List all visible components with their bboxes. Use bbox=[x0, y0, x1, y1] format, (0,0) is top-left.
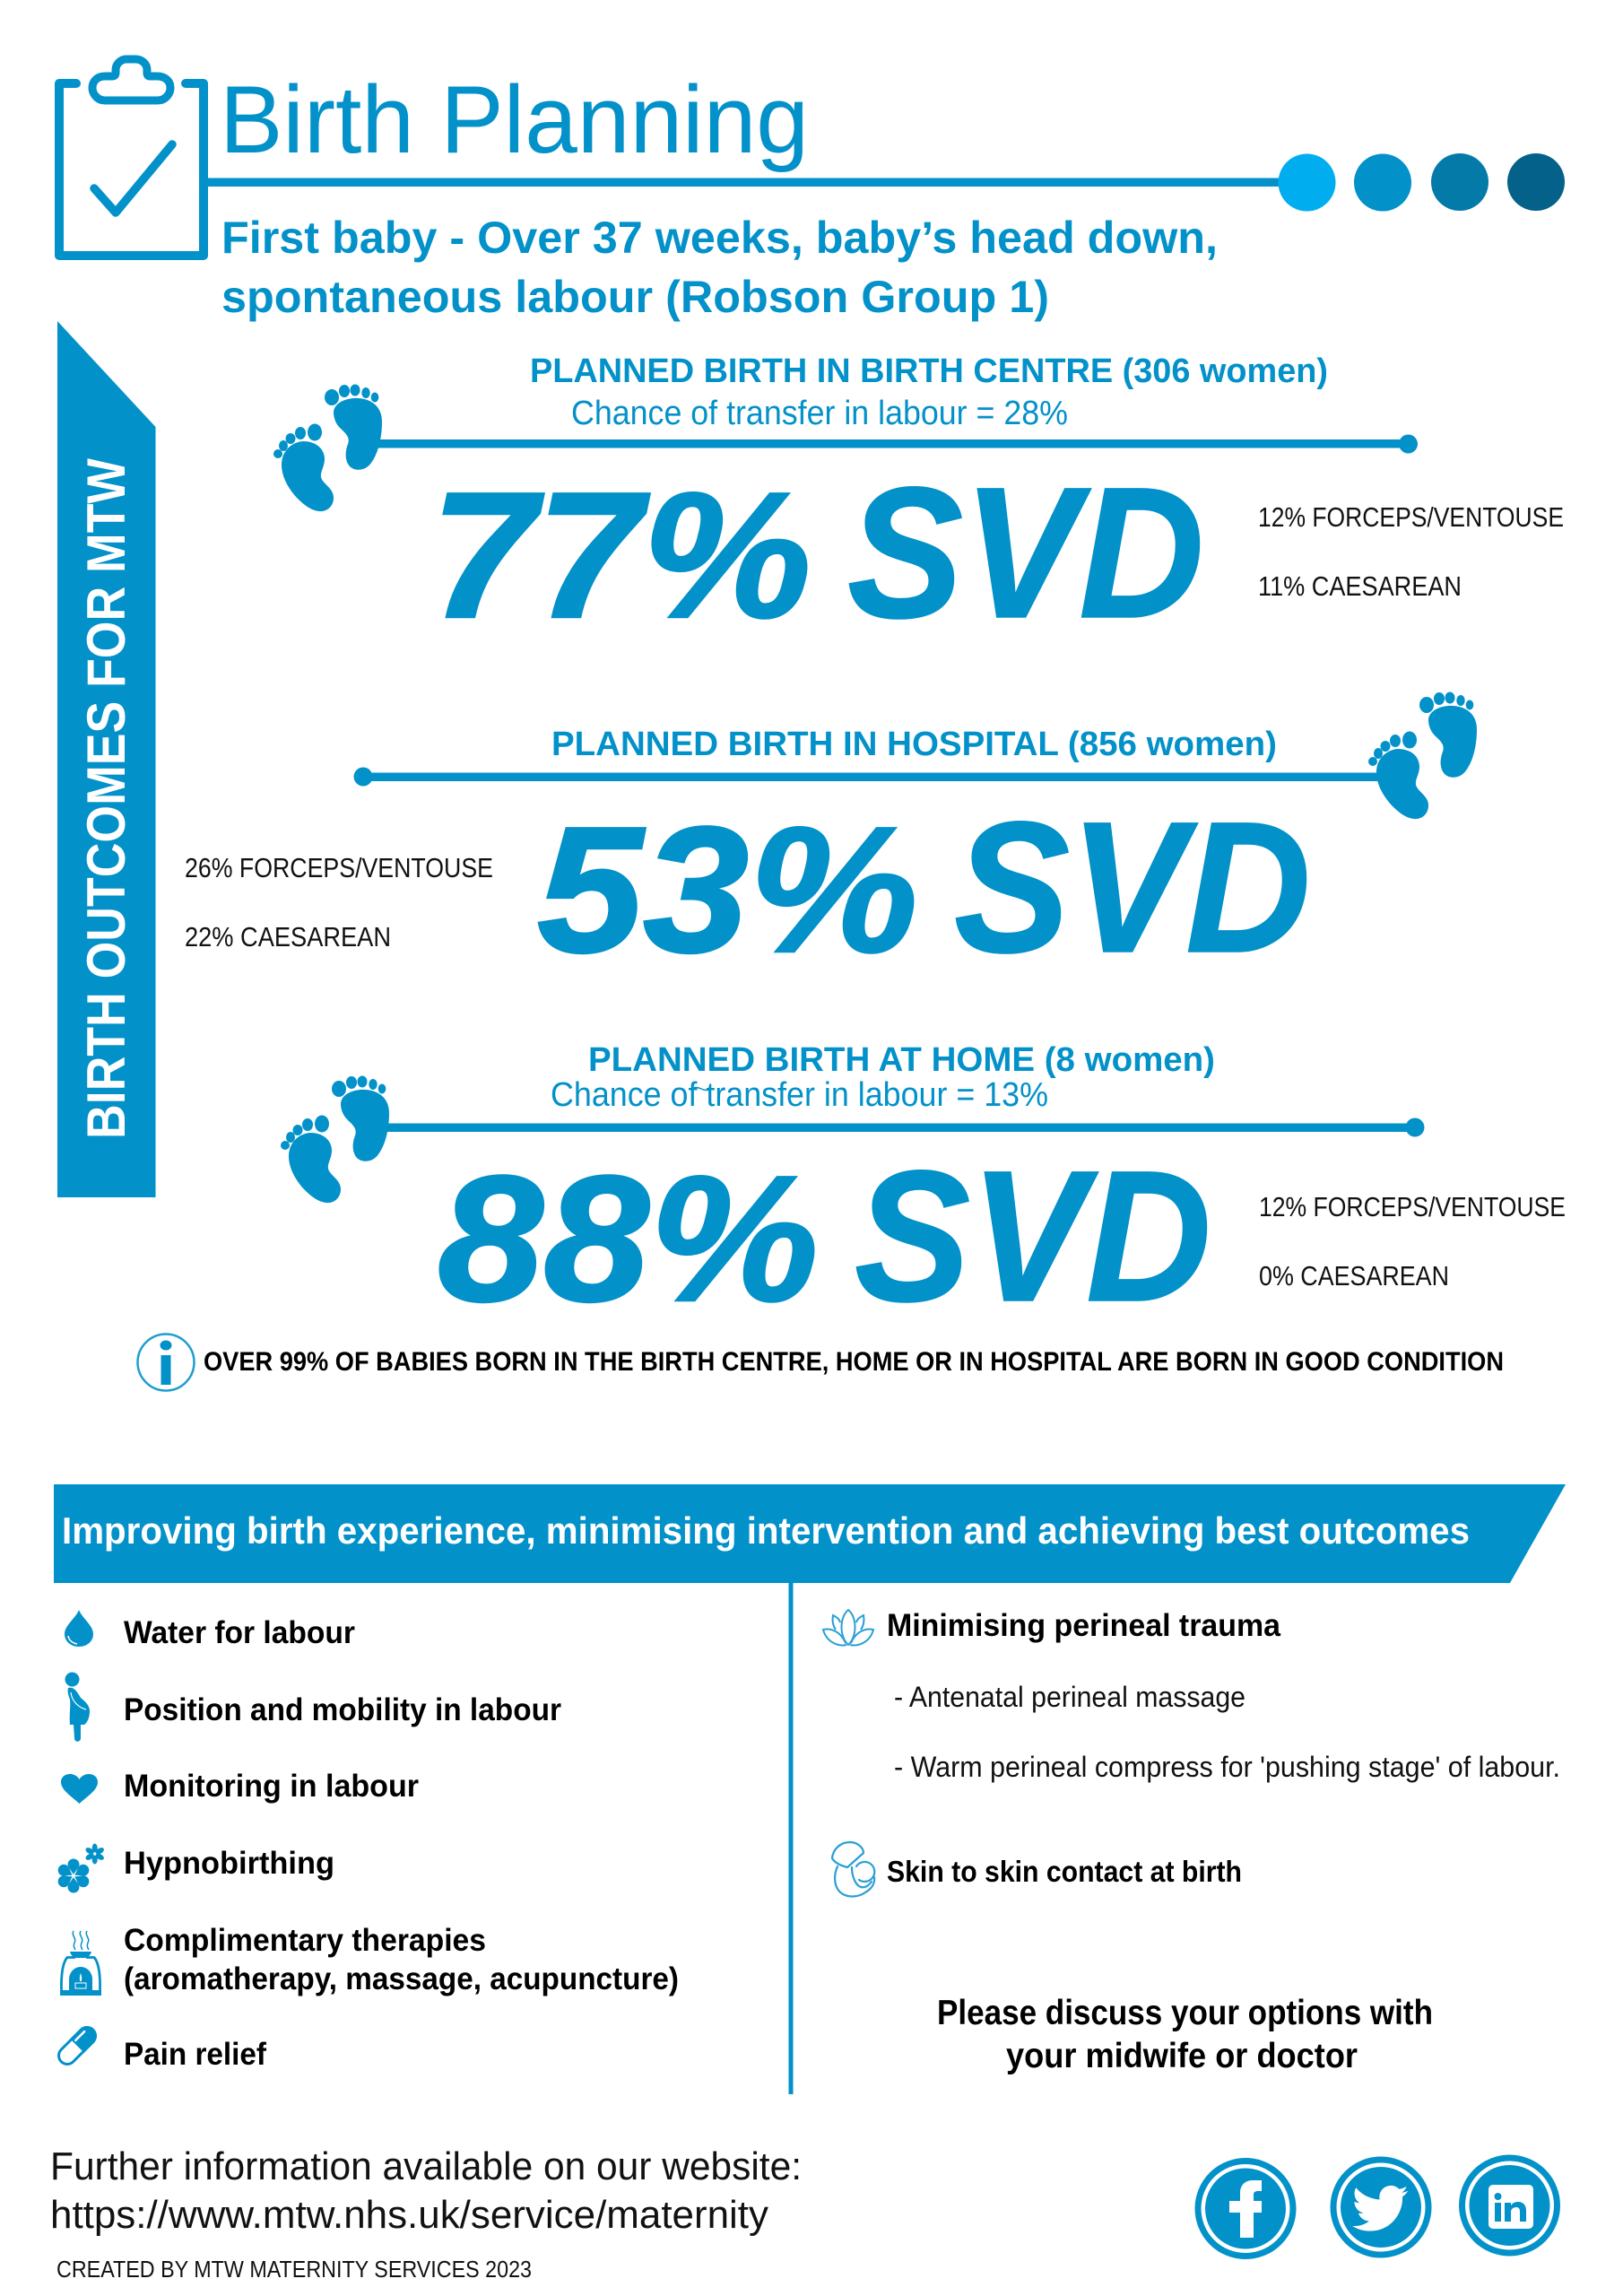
item: Minimising perineal trauma bbox=[887, 1608, 1281, 1643]
item: Monitoring in labour bbox=[124, 1769, 419, 1804]
item: Pain relief bbox=[124, 2037, 266, 2072]
panel: planned birth in hospital bbox=[185, 692, 1477, 992]
icon: linkedin bbox=[1462, 2158, 1557, 2253]
icon: pregnant woman bbox=[65, 1672, 90, 1742]
other outcomes: 26% FORCEPS/VENTOUSE bbox=[185, 852, 493, 883]
heading: PLANNED BIRTH AT HOME (8 women) bbox=[588, 1041, 1215, 1079]
other outcomes: 12% FORCEPS/VENTOUSE bbox=[1259, 1191, 1566, 1222]
item: Water for labour bbox=[124, 1615, 355, 1650]
subtitle bbox=[221, 213, 1218, 322]
panel: planned birth in birth centre bbox=[273, 352, 1564, 657]
sub-item: - Warm perineal compress for 'pushing stage' of labour. bbox=[894, 1751, 1560, 1783]
big figure: 77% SVD bbox=[430, 449, 1204, 657]
subtitle: spontaneous labour (Robson Group 1) bbox=[221, 272, 1049, 322]
other outcomes: 11% CAESAREAN bbox=[1258, 570, 1462, 602]
stray mark above transfer text bbox=[690, 1087, 712, 1091]
other outcomes bbox=[1258, 501, 1564, 602]
panel: planned birth at home bbox=[281, 1041, 1566, 1341]
item bbox=[124, 1923, 679, 1996]
side ribbon: birth outcomes for MTW: BIRTH OUTCOMES FOR MTW bbox=[76, 458, 136, 1139]
footer information bbox=[50, 2144, 802, 2283]
item: Complimentary therapies bbox=[124, 1923, 486, 1958]
item: Hypnobirthing bbox=[124, 1846, 334, 1881]
icon: twitter bbox=[1333, 2160, 1428, 2255]
item: (aromatherapy, massage, acupuncture) bbox=[124, 1961, 679, 1996]
timeline rule bbox=[353, 768, 1381, 786]
big figure: 77% SVD: 77% bbox=[430, 456, 812, 656]
big figure: 88% SVD bbox=[438, 1133, 1211, 1341]
panel: left list bbox=[55, 1610, 679, 2072]
big figure: 53% SVD: SVD bbox=[954, 784, 1311, 992]
other outcomes bbox=[185, 852, 493, 952]
icon: heart bbox=[61, 1774, 98, 1804]
subtitle: First baby - Over 37 weeks, baby’s head down, bbox=[221, 213, 1218, 263]
other outcomes: 0% CAESAREAN bbox=[1259, 1260, 1449, 1292]
other outcomes: 12% FORCEPS/VENTOUSE bbox=[1258, 501, 1564, 533]
social icons bbox=[1198, 2158, 1557, 2257]
icon: baby feet bbox=[273, 384, 382, 511]
heading: PLANNED BIRTH IN HOSPITAL (856 women) bbox=[551, 726, 1277, 763]
banner bbox=[54, 1484, 1566, 1583]
footer information: Further information available on our website: bbox=[50, 2144, 802, 2188]
icon: aromatherapy burner bbox=[60, 1931, 101, 1996]
icon: mother and baby bbox=[832, 1842, 874, 1896]
other outcomes bbox=[1259, 1191, 1566, 1292]
icon: baby feet bbox=[281, 1076, 389, 1203]
transfer chance: Chance of transfer in labour = 28% bbox=[571, 395, 1068, 432]
call to action: your midwife or doctor bbox=[1006, 2037, 1358, 2075]
icon: information bbox=[138, 1335, 194, 1390]
call to action bbox=[937, 1994, 1433, 2075]
transfer chance: Chance of transfer in labour = 13% bbox=[551, 1076, 1048, 1114]
timeline rule bbox=[377, 434, 1418, 454]
call to action: Please discuss your options with bbox=[937, 1994, 1433, 2032]
icon: facebook bbox=[1198, 2161, 1293, 2257]
icon: water drop bbox=[65, 1610, 93, 1647]
icon: lotus bbox=[823, 1610, 873, 1645]
icon: baby feet bbox=[1368, 692, 1477, 819]
icon: pill bbox=[55, 2022, 101, 2068]
heading: PLANNED BIRTH IN BIRTH CENTRE (306 women) bbox=[530, 352, 1328, 390]
side ribbon: birth outcomes for MTW bbox=[57, 321, 156, 1197]
banner: Improving birth experience, minimising intervention and achieving best outcomes bbox=[62, 1509, 1470, 1552]
big figure: 88% SVD: SVD bbox=[855, 1133, 1211, 1341]
header bbox=[59, 59, 1565, 322]
big figure: 53% SVD bbox=[537, 784, 1311, 992]
other outcomes: 22% CAESAREAN bbox=[185, 921, 391, 952]
panel: right list bbox=[823, 1608, 1560, 2075]
item: Skin to skin contact at birth bbox=[887, 1855, 1242, 1888]
big figure: 88% SVD: 88% bbox=[438, 1139, 819, 1339]
sub-item: - Antenatal perineal massage bbox=[894, 1681, 1245, 1713]
progress dots bbox=[1279, 153, 1565, 212]
callout: good condition bbox=[138, 1335, 1504, 1390]
title: Birth Planning bbox=[220, 65, 809, 173]
timeline rule bbox=[384, 1118, 1424, 1137]
vertical divider bbox=[789, 1583, 793, 2094]
big figure: 53% SVD: 53% bbox=[537, 790, 918, 990]
icon: clipboard with check mark bbox=[59, 59, 204, 256]
statement: OVER 99% OF BABIES BORN IN THE BIRTH CENTRE, HOME OR IN HOSPITAL ARE BORN IN GOOD CONDITION bbox=[204, 1347, 1504, 1377]
header rule bbox=[208, 178, 1284, 187]
icon: flowers bbox=[56, 1844, 105, 1892]
footer information: CREATED BY MTW MATERNITY SERVICES 2023 bbox=[56, 2256, 532, 2283]
big figure: 77% SVD: SVD bbox=[847, 449, 1204, 657]
footer information: https://www.mtw.nhs.uk/service/maternity bbox=[50, 2193, 768, 2237]
item: Position and mobility in labour bbox=[124, 1692, 561, 1727]
